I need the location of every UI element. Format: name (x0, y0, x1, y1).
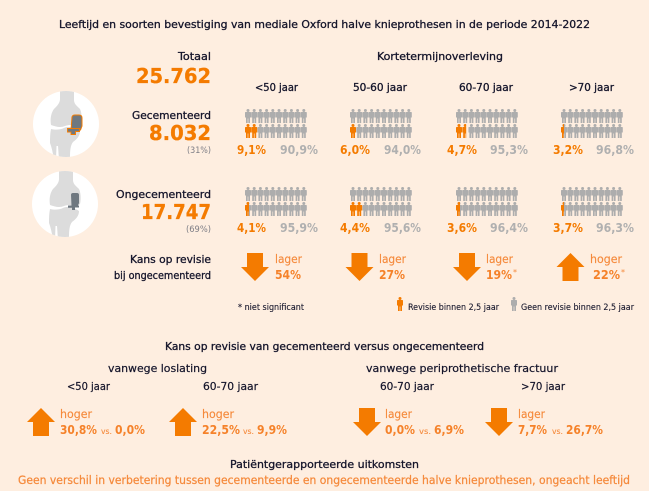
arrow up: over 70 higher: * (621, 268, 625, 277)
age group headers (255, 82, 615, 94)
arrow down: fracture 60-70: lager (385, 407, 412, 421)
pictogram: uncemented under 50: 95,9% (280, 221, 318, 235)
cemented count: Gecementeerd (132, 110, 211, 122)
arrow up: loosening 60-70: 9,9% (257, 423, 287, 437)
uncemented count: (69%) (186, 225, 211, 235)
pictogram: uncemented 60-70: 96,4% (490, 221, 528, 235)
pictogram: cemented under 50: 90,9% (280, 143, 318, 157)
arrow up: loosening 60-70 (169, 407, 287, 437)
arrow up: over 70 higher (556, 252, 625, 282)
pictogram: uncemented over 70: 3,7% (553, 221, 583, 235)
arrow up: loosening under 50: hoger (60, 407, 92, 421)
uncemented count (116, 189, 211, 235)
pictogram: uncemented over 70: 96,3% (596, 221, 634, 235)
pictogram: cemented over 70: 3,2% (553, 143, 583, 157)
icon: cemented knee (33, 88, 99, 160)
subheading: periprosthetic fracture: vanwege periprothetische fractuur (366, 363, 559, 375)
pictogram: uncemented 50-60: 95,6% (384, 221, 421, 235)
arrow up: loosening under 50: vs. (101, 427, 112, 436)
arrow down: 60-70 lower: * (513, 268, 517, 277)
cemented count (132, 110, 211, 156)
revision risk label: Kans op revisie (130, 254, 211, 266)
arrow down: fracture 60-70 (353, 407, 464, 437)
arrow down: fracture 60-70: 6,9% (434, 423, 464, 437)
pictogram: cemented under 50 (237, 109, 318, 157)
arrow down: fracture 60-70: vs. (419, 427, 431, 436)
uncemented count: 17.747 (141, 200, 211, 224)
arrow up: loosening under 50 (27, 407, 145, 437)
arrow up: over 70 higher: 22% (593, 268, 620, 282)
subheading: periprosthetic fracture: >70 jaar (521, 381, 566, 393)
arrow down: under 50 lower: lager (275, 252, 302, 266)
arrow down: 50-60 lower: 27% (379, 268, 405, 282)
icon: uncemented knee (32, 168, 98, 240)
subheading: loosening: 60-70 jaar (203, 381, 259, 393)
pictogram: cemented 50-60: 6,0% (340, 143, 370, 157)
arrow up: loosening under 50: 0,0% (115, 423, 145, 437)
pictogram: uncemented 60-70 (447, 187, 528, 235)
total count: Totaal (177, 51, 211, 63)
pictogram: uncemented 60-70: 3,6% (447, 221, 477, 235)
arrow up: loosening under 50: 30,8% (60, 423, 97, 437)
subheading: periprosthetic fracture (366, 363, 566, 393)
cemented count: (31%) (187, 146, 211, 156)
age group headers: 50-60 jaar (353, 82, 408, 94)
arrow down: fracture 60-70: 0,0% (385, 423, 415, 437)
pictogram: cemented 50-60 (340, 109, 421, 157)
age group headers: <50 jaar (255, 82, 299, 94)
arrow down: fracture over 70: 7,7% (518, 423, 547, 437)
subheading: loosening: vanwege loslating (108, 363, 207, 375)
age group headers: >70 jaar (569, 82, 615, 94)
survival heading: Kortetermijnoverleving (377, 51, 503, 63)
total count (136, 51, 211, 88)
pictogram: cemented 60-70: 95,3% (490, 143, 528, 157)
pictogram: cemented over 70 (553, 109, 634, 157)
footnote: * niet significant (238, 303, 305, 313)
patient reported outcomes heading: Patiëntgerapporteerde uitkomsten (230, 459, 419, 471)
subheading: loosening: <50 jaar (67, 381, 111, 393)
pictogram: uncemented under 50 (237, 187, 318, 235)
total count: 25.762 (136, 64, 211, 88)
arrow down: 50-60 lower: lager (379, 252, 406, 266)
section heading: Kans op revisie van gecementeerd versus ongecementeerd (165, 341, 484, 353)
arrow up: over 70 higher: hoger (590, 252, 622, 266)
title: Leeftijd en soorten bevestiging van mediale Oxford halve knieprothesen in de periode 2014-2022 (59, 19, 590, 31)
legend: Geen revisie binnen 2,5 jaar (521, 303, 634, 313)
pictogram: cemented under 50: 9,1% (237, 143, 266, 157)
legend: Revisie binnen 2,5 jaar (408, 303, 499, 313)
arrow up: loosening 60-70: hoger (202, 407, 234, 421)
arrow down: fracture over 70: lager (518, 407, 545, 421)
arrow down: fracture over 70 (485, 407, 603, 437)
arrow down: fracture over 70: vs. (552, 427, 563, 436)
subheading: loosening (67, 363, 259, 393)
revision risk label: bij ongecementeerd (114, 270, 211, 282)
age group headers: 60-70 jaar (459, 82, 514, 94)
uncemented count: Ongecementeerd (116, 189, 211, 201)
arrow down: fracture over 70: 26,7% (566, 423, 603, 437)
pictogram: cemented 50-60: 94,0% (384, 143, 421, 157)
pictogram: uncemented 50-60 (340, 187, 421, 235)
arrow up: loosening 60-70: 22,5% (202, 423, 240, 437)
pictogram: cemented over 70: 96,8% (596, 143, 634, 157)
subheading: periprosthetic fracture: 60-70 jaar (380, 381, 435, 393)
pictogram: cemented 60-70: 4,7% (447, 143, 477, 157)
arrow down: 60-70 lower: lager (486, 252, 513, 266)
revision risk label (114, 254, 211, 282)
arrow down: 50-60 lower (346, 252, 406, 282)
cemented count: 8.032 (149, 121, 211, 145)
arrow down: under 50 lower (241, 252, 302, 282)
arrow down: 60-70 lower: 19% (486, 268, 512, 282)
pictogram: cemented 60-70 (447, 109, 528, 157)
arrow down: 60-70 lower (453, 252, 517, 282)
pictogram: uncemented under 50: 4,1% (237, 221, 266, 235)
arrow up: loosening 60-70: vs. (243, 427, 254, 436)
legend (397, 297, 634, 313)
pictogram: uncemented 50-60: 4,4% (340, 221, 370, 235)
arrow down: under 50 lower: 54% (275, 268, 301, 282)
pictogram: uncemented over 70 (553, 187, 634, 235)
